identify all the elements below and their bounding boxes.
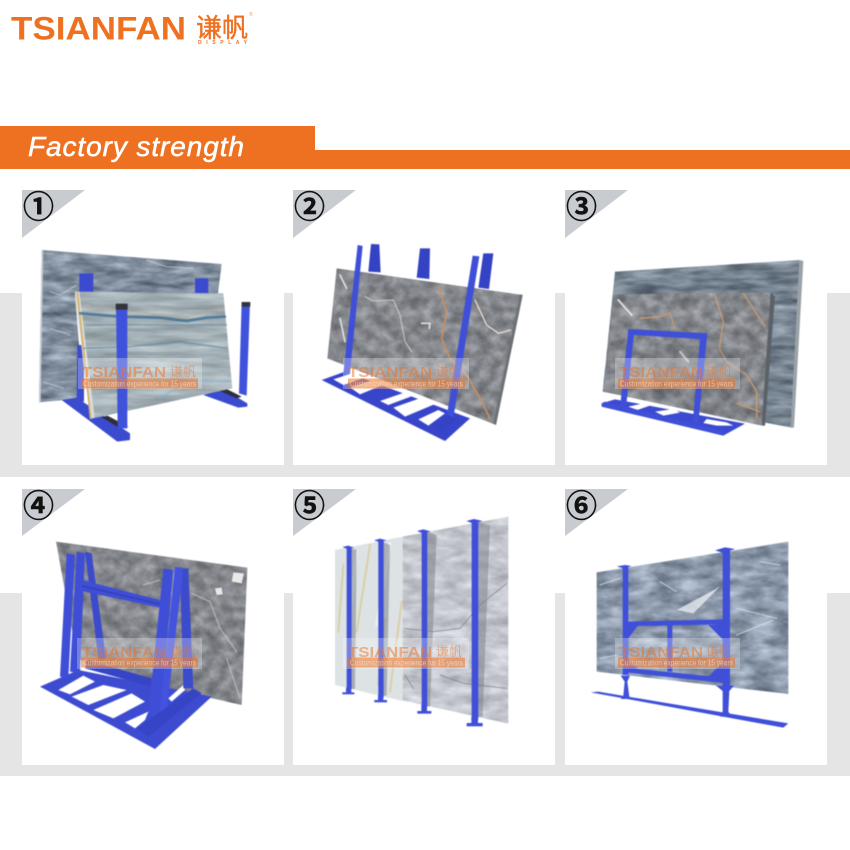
watermark: 谦帆	[706, 644, 732, 659]
watermark	[615, 358, 740, 389]
watermark: Customization experience for 15 years	[350, 380, 463, 388]
illustration: framed rack with slab	[591, 542, 788, 728]
section heading: Factory strength	[0, 126, 850, 169]
illustration: A-frame rack with grey slab	[322, 244, 523, 441]
watermark: Customization experience for 15 years	[620, 380, 733, 388]
logo: DISPLAY	[198, 40, 248, 46]
watermark: 谦帆	[706, 364, 732, 379]
watermark: TSIANFAN	[348, 364, 432, 381]
watermark: Customization experience for 15 years	[83, 658, 196, 668]
panel 4: ④	[23, 481, 54, 526]
logo: ®	[249, 11, 253, 18]
watermark: 谦帆	[436, 364, 462, 379]
section heading: Factory strength: Factory strength	[28, 131, 244, 162]
panel 5	[293, 477, 555, 765]
watermark	[615, 638, 740, 669]
watermark	[78, 358, 202, 389]
panel 2: ②	[294, 182, 325, 227]
watermark: 谦帆	[170, 364, 196, 379]
panel 1	[22, 182, 284, 465]
logo: 谦帆	[196, 13, 248, 43]
logo: TSIANFAN	[11, 10, 186, 46]
watermark: TSIANFAN	[82, 364, 166, 381]
watermark: Customization experience for 15 years	[620, 658, 733, 668]
panel 5: ⑤	[294, 481, 325, 526]
watermark	[343, 358, 469, 389]
watermark: 谦帆	[170, 644, 196, 659]
panel 6: ⑥	[566, 481, 597, 526]
grey band: lower row	[0, 593, 850, 776]
watermark: 谦帆	[436, 644, 462, 659]
watermark	[343, 638, 469, 669]
watermark: Customization experience for 15 years	[350, 658, 463, 668]
illustration: heavy A-frame rack with slab	[40, 542, 247, 749]
illustration: wall rack with two light slabs	[335, 517, 508, 726]
illustration: low frame with two slabs	[602, 260, 803, 436]
watermark: Customization experience for 15 years	[83, 380, 196, 388]
watermark: TSIANFAN	[82, 644, 166, 661]
watermark	[77, 638, 202, 669]
panel 3	[565, 182, 827, 465]
illustration: two marble slabs on L-frame rack	[39, 250, 250, 442]
grey band: upper row	[0, 293, 850, 477]
panel 2	[293, 182, 555, 465]
panel 4	[22, 477, 284, 765]
panel 1: ①	[23, 182, 54, 227]
watermark: TSIANFAN	[619, 364, 703, 381]
watermark: TSIANFAN	[348, 644, 432, 661]
watermark: TSIANFAN	[619, 644, 703, 661]
panel 3: ③	[566, 182, 597, 227]
panel 6	[565, 477, 827, 765]
logo	[11, 10, 253, 46]
